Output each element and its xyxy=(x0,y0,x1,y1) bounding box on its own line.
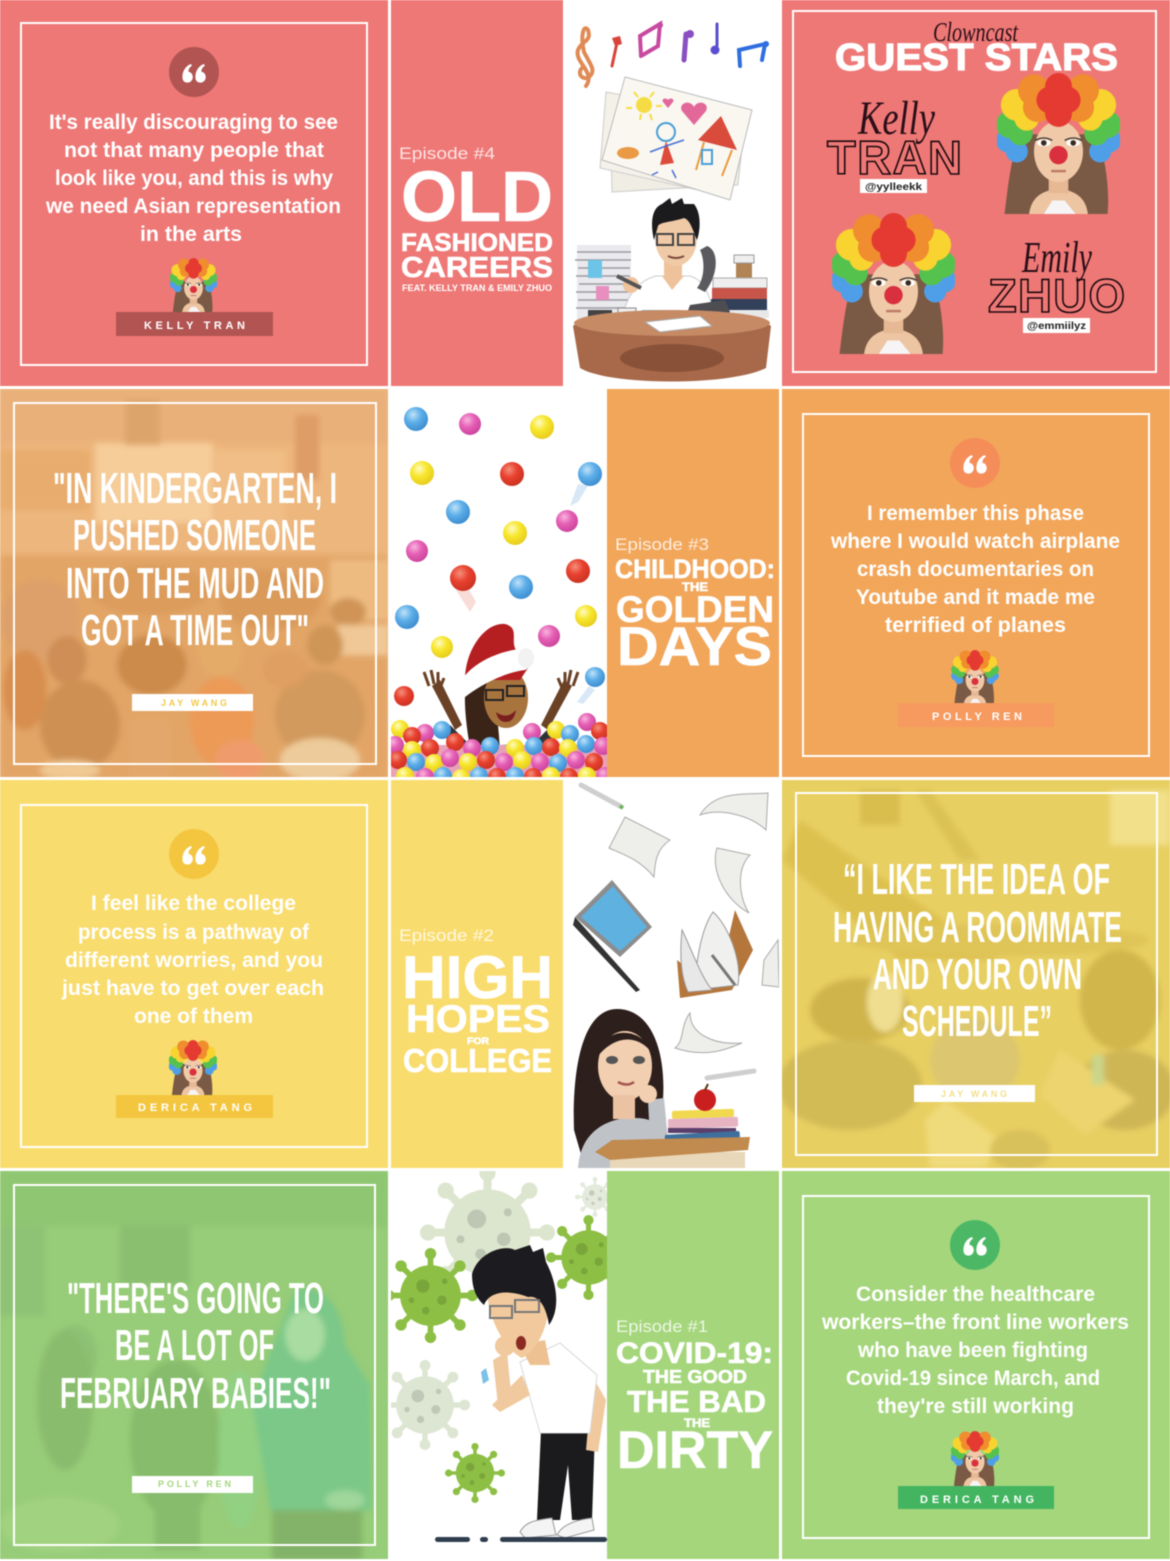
quote text xyxy=(833,855,1122,1046)
quote text: crash documentaries on xyxy=(857,558,1094,581)
quote text: where I would watch airplane xyxy=(830,530,1120,553)
episode title: CAREERS xyxy=(401,252,553,284)
illustration: ball pit xyxy=(390,712,608,778)
illustration: coughing man xyxy=(472,1245,606,1538)
quote text xyxy=(61,892,324,1028)
episode title xyxy=(616,1317,773,1480)
panel: Polly Ren quote xyxy=(782,389,1170,777)
quote text: BE A LOT OF xyxy=(115,1321,274,1370)
name label xyxy=(116,1095,273,1118)
guest: Kelly Tran: TRAN xyxy=(827,131,962,184)
episode title xyxy=(399,144,553,293)
name label xyxy=(914,1085,1035,1102)
episode title xyxy=(615,535,775,677)
guest: Emily Zhuo xyxy=(988,233,1125,333)
icon: Kelly clown portrait xyxy=(996,73,1121,214)
illustration: ground line xyxy=(435,1537,607,1542)
illustration: person in ball pit xyxy=(424,624,578,765)
episode title xyxy=(399,926,553,1079)
quote text: "THERE'S GOING TO xyxy=(67,1274,324,1323)
quote text: process is a pathway of xyxy=(78,921,310,944)
illustration: falling balls xyxy=(394,407,605,706)
icon: quote mark xyxy=(950,1220,1000,1270)
quote text: just have to get over each xyxy=(61,977,324,1000)
quote text: PUSHED SOMEONE xyxy=(73,511,316,560)
icon: music notes xyxy=(578,22,769,86)
episode title: Episode #2 xyxy=(399,926,494,945)
guest: Emily Zhuo: @emmiilyz xyxy=(1027,321,1086,332)
panel: roommate photo quote xyxy=(778,780,1170,1170)
icon: quote mark xyxy=(169,47,219,97)
quote text: they're still working xyxy=(877,1395,1074,1418)
icon: quote mark xyxy=(169,829,219,879)
episode title: FEAT. KELLY TRAN & EMILY ZHUO xyxy=(402,283,552,293)
quote text: I feel like the college xyxy=(91,892,296,915)
quote text xyxy=(53,464,337,655)
photo: masked people xyxy=(0,1171,388,1560)
quote text: "IN KINDERGARTEN, I xyxy=(53,464,337,513)
icon: clown avatar xyxy=(170,258,217,312)
quote text: Youtube and it made me xyxy=(856,586,1095,609)
quote text: terrified of planes xyxy=(885,614,1066,637)
quote text: who have been fighting xyxy=(857,1339,1088,1362)
name label: DERICA TANG xyxy=(138,1102,252,1114)
icon: quote mark xyxy=(950,438,1000,488)
guest: Kelly Tran: @yylleekk xyxy=(865,182,923,193)
episode title: DAYS xyxy=(617,615,772,677)
episode title: CHILDHOOD: xyxy=(615,554,775,584)
photo: lecture hall xyxy=(778,790,1170,1170)
panel: Derica Tang healthcare quote xyxy=(782,1171,1170,1559)
episode title: THE xyxy=(684,1416,710,1430)
quote text xyxy=(45,111,341,246)
guest: Emily Zhuo: Emily xyxy=(1021,233,1092,282)
panel: guest stars xyxy=(782,0,1170,386)
illustration: man at desk xyxy=(573,198,771,382)
episode title: COLLEGE xyxy=(403,1042,552,1079)
quote text: FEBRUARY BABIES!" xyxy=(60,1369,331,1418)
quote text: one of them xyxy=(134,1005,253,1028)
icon: clown avatar xyxy=(951,650,999,704)
quote text xyxy=(821,1283,1129,1418)
episode title: THE GOOD xyxy=(643,1367,747,1387)
episode title: OLD xyxy=(401,158,553,237)
quote text: SCHEDULE” xyxy=(902,997,1052,1046)
quote text: look like you, and this is why xyxy=(55,167,333,190)
quote text: in the arts xyxy=(140,223,242,246)
quote text: workers–the front line workers xyxy=(821,1311,1129,1334)
quote text: GOT A TIME OUT" xyxy=(81,606,309,655)
name label: POLLY REN xyxy=(158,1479,231,1489)
quote text: different worries, and you xyxy=(65,949,323,972)
illustration: flying papers and tablet xyxy=(573,785,779,1078)
quote text: not that many people that xyxy=(64,139,324,162)
icon: clown avatar xyxy=(169,1040,217,1095)
quote text: Covid-19 since March, and xyxy=(846,1367,1100,1390)
episode title: GOLDEN xyxy=(616,589,774,630)
panel: February babies photo quote xyxy=(0,1171,388,1560)
quote text: Consider the healthcare xyxy=(856,1283,1095,1306)
panel: episode 2 cover xyxy=(391,780,780,1168)
episode title: HOPES xyxy=(406,998,550,1041)
heading: Clowncast xyxy=(933,17,1019,47)
name label xyxy=(132,1476,253,1493)
name label: JAY WANG xyxy=(161,698,227,708)
quote text xyxy=(830,502,1120,637)
icon: Emily clown portrait xyxy=(831,213,956,354)
name label: DERICA TANG xyxy=(920,1494,1034,1506)
guest: Kelly Tran xyxy=(827,92,962,193)
panel: episode 3 cover xyxy=(386,389,779,787)
episode title: COVID-19: xyxy=(616,1337,773,1370)
heading: GUEST STARS xyxy=(835,37,1118,79)
quote text xyxy=(61,1282,330,1410)
name label xyxy=(898,703,1054,727)
episode title: Episode #3 xyxy=(615,535,709,554)
illustration: viruses xyxy=(390,1170,608,1504)
guest: Emily Zhuo: ZHUO xyxy=(988,269,1125,322)
episode title: THE BAD xyxy=(627,1384,766,1419)
panel: episode 1 cover xyxy=(380,1165,779,1559)
panel: episode 4 cover xyxy=(391,0,780,386)
name label xyxy=(132,694,253,711)
episode title: Episode #4 xyxy=(399,144,495,163)
quote text: we need Asian representation xyxy=(45,195,341,218)
episode title: DIRTY xyxy=(617,1421,773,1480)
episode title: THE xyxy=(682,580,708,594)
heading xyxy=(835,17,1118,79)
name label: KELLY TRAN xyxy=(144,320,245,332)
panel: kindergarten photo quote xyxy=(0,389,388,782)
name label: JAY WANG xyxy=(941,1089,1007,1099)
episode title: HIGH xyxy=(402,944,553,1011)
name label: POLLY REN xyxy=(932,711,1022,723)
panel: Kelly Tran quote xyxy=(0,0,388,386)
name label xyxy=(116,312,273,336)
photo: classroom xyxy=(0,389,388,782)
name label xyxy=(898,1486,1054,1509)
quote text: I remember this phase xyxy=(867,502,1084,525)
quote text: INTO THE MUD AND xyxy=(66,559,324,608)
icon: child drawing xyxy=(600,77,752,200)
panel: Derica Tang college quote xyxy=(0,780,388,1168)
episode title: Episode #1 xyxy=(616,1317,708,1336)
icon: clown avatar xyxy=(951,1431,999,1486)
illustration: girl at desk xyxy=(574,1009,750,1168)
episode title: FASHIONED xyxy=(401,229,553,257)
guest: Kelly Tran: Kelly xyxy=(857,92,936,145)
episode title: FOR xyxy=(467,1036,490,1046)
quote text: It's really discouraging to see xyxy=(49,111,338,134)
